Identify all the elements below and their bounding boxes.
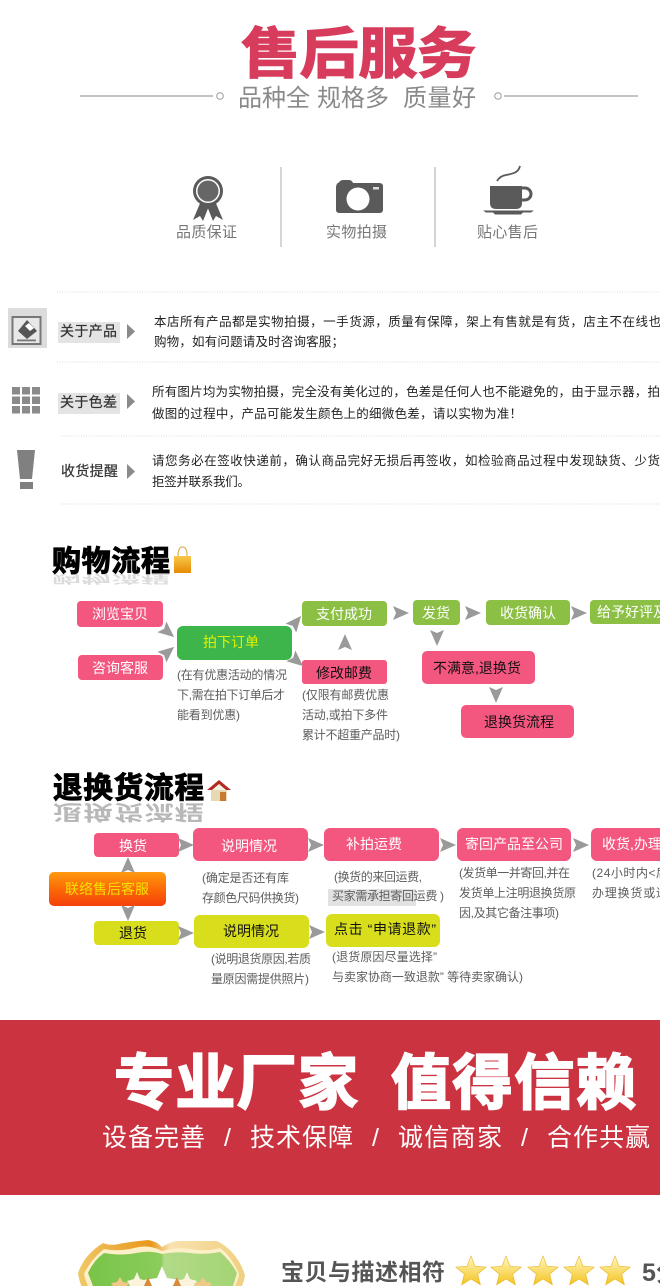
- subtitle with side rules: 质量好: [403, 85, 476, 112]
- note: postage: (仅限有邮费优惠: [302, 688, 389, 702]
- note: check stock: 存颜色尺码供换货): [202, 890, 299, 905]
- row text: about product: 本店所有产品都是实物拍摄，一手货源，质量有保障，架上有售就是有货，店主不在线也: [154, 314, 660, 329]
- step: ship: [413, 600, 460, 625]
- row text: about product: 购物，如有问题请及时咨询客服；: [154, 334, 344, 349]
- heading: shopping process: 购物流程: [52, 545, 170, 578]
- step: payment: 支付成功: [316, 606, 372, 622]
- banner subline: /: [521, 1124, 528, 1152]
- note: return postage: (换货的来回运费,: [334, 869, 422, 884]
- note: 24 hours: [592, 866, 660, 900]
- row text: delivery reminder: 拒签并联系我们。: [152, 474, 250, 489]
- note: order discount: 能看到优惠): [177, 708, 240, 722]
- row text: delivery reminder: [152, 453, 660, 489]
- step: place order: 拍下订单: [203, 634, 259, 650]
- panel: red banner: [0, 1020, 660, 1195]
- note: refund reason: [211, 951, 311, 986]
- step: place order: [177, 626, 292, 660]
- step: contact service: 联络售后客服: [65, 881, 149, 897]
- note: delivery slip: 发货单上注明退换货原: [459, 885, 576, 900]
- row text: about colour difference: 所有图片均为实物拍摄，完全没有美化过的，色差是任何人也不能避免的，由于显示器，拍: [152, 384, 660, 399]
- step: browse: [77, 601, 163, 627]
- heading: shopping process: 购物流程: [52, 573, 170, 586]
- banner subline: 技术保障: [250, 1124, 353, 1152]
- row label: delivery reminder: 收货提醒: [61, 463, 118, 479]
- banner headline: 值得信赖: [391, 1050, 636, 1117]
- banner subline: 诚信商家: [398, 1124, 502, 1152]
- step: modify postage: [302, 660, 387, 684]
- icon: camera: [336, 180, 383, 213]
- note: refund reason: 量原因需提供照片): [211, 971, 309, 986]
- note: postage: 累计不超重产品时): [302, 727, 400, 742]
- note: order discount: 下,需在拍下订单后才: [177, 687, 285, 702]
- step: explain refund: 说明情况: [223, 923, 279, 939]
- step: browse: 浏览宝贝: [92, 606, 148, 622]
- icon: colour grid: [12, 387, 40, 414]
- note: postage: [302, 688, 400, 742]
- step: consult: [78, 655, 163, 680]
- rating label: 宝贝与描述相符: [281, 1259, 445, 1285]
- heading: return process: [53, 772, 204, 823]
- banner headline: 专业厂家: [114, 1050, 358, 1117]
- note: refund choice: [332, 949, 523, 984]
- step: return process: 退换货流程: [484, 714, 554, 730]
- step: refund: [94, 921, 179, 945]
- step: exchange: 换货: [119, 838, 147, 854]
- step: consult: 咨询客服: [92, 660, 148, 676]
- row text: about colour difference: [152, 384, 660, 421]
- row text: about colour difference: 做图的过程中，产品可能发生颜色上的细微色差，请以实物为准！: [152, 406, 522, 421]
- step: apply refund: [326, 914, 440, 947]
- step: contact service: [49, 872, 166, 906]
- note: delivery slip: 因,及其它备注事项): [459, 905, 559, 920]
- note: return postage: [328, 869, 444, 906]
- step: refund: 退货: [119, 925, 147, 941]
- icon: exclamation mark: [17, 450, 35, 489]
- step: confirm: [486, 600, 570, 625]
- step: apply refund: 点击 “申请退款”: [334, 921, 436, 937]
- note: postage: 活动,或拍下多件: [302, 707, 388, 722]
- step: review: [590, 600, 660, 624]
- title: 售后服务: [241, 24, 476, 86]
- step: send back: [457, 828, 571, 861]
- icon: product badge: [8, 308, 47, 348]
- five stars: [456, 1256, 630, 1285]
- note: check stock: (确定是否还有库: [202, 870, 289, 885]
- row text: delivery reminder: 请您务必在签收快递前，确认商品完好无损后再签收，如检验商品过程中发现缺货、少货: [152, 453, 660, 468]
- icon: house: [207, 780, 231, 801]
- arrows: return flow: [121, 838, 589, 940]
- step: return process: [461, 705, 574, 738]
- divider: [280, 167, 282, 247]
- subtitle with side rules: 规格多: [317, 85, 389, 112]
- banner subline: 设备完善: [102, 1124, 205, 1152]
- icon: coffee cup: [483, 166, 534, 214]
- step: confirm: 收货确认: [500, 605, 556, 621]
- banner subline: /: [372, 1124, 379, 1152]
- subtitle with side rules: [80, 85, 638, 112]
- subtitle with side rules: 品种全: [238, 85, 310, 112]
- arrows: shopping flow: [157, 606, 587, 703]
- heading: return process: 退换货流程: [53, 772, 204, 805]
- step: extra postage: [324, 828, 439, 861]
- banner subline: [102, 1124, 650, 1152]
- note: refund choice: (退货原因尽量选择”: [332, 949, 437, 964]
- row text: about product: [154, 314, 660, 349]
- heading: return process: 退换货流程: [53, 800, 204, 823]
- note: return postage: 买家需承担寄回运费 ): [332, 888, 444, 903]
- label: after-sale care: 贴心售后: [477, 224, 538, 241]
- step: explain exchange: 说明情况: [221, 838, 277, 854]
- step: exchange: [94, 833, 179, 857]
- step: modify postage: 修改邮费: [316, 665, 372, 681]
- icon: rosette: [193, 176, 223, 221]
- note: delivery slip: [459, 865, 576, 920]
- row label: about colour difference: 关于色差: [60, 394, 117, 410]
- row label: about product: 关于产品: [60, 323, 117, 339]
- step: receive: [591, 828, 660, 861]
- step: ship: 发货: [422, 605, 450, 621]
- note: refund choice: 与卖家协商一致退款” 等待卖家确认): [332, 969, 523, 984]
- step: explain refund: [194, 915, 309, 948]
- row label: about colour difference: [58, 393, 135, 414]
- step: payment: [302, 601, 387, 626]
- step: extra postage: 补拍运费: [346, 836, 402, 852]
- divider: [434, 167, 436, 247]
- icon: shield badge: [78, 1240, 245, 1286]
- icon: shopping bag: [174, 547, 191, 573]
- banner headline: [114, 1050, 636, 1117]
- row label: about product: [58, 322, 135, 343]
- note: delivery slip: (发货单一并寄回,并在: [459, 865, 570, 880]
- step: send back: 寄回产品至公司: [465, 836, 563, 852]
- label: quality guarantee: 品质保证: [176, 224, 237, 241]
- step: explain exchange: [193, 828, 308, 861]
- banner subline: /: [224, 1124, 231, 1152]
- step: unsatisfied: [422, 651, 535, 684]
- step: unsatisfied: 不满意,退换货: [433, 660, 521, 676]
- note: refund reason: (说明退货原因,若质: [211, 951, 311, 966]
- note: order discount: [177, 667, 287, 722]
- note: check stock: [202, 870, 299, 905]
- label: real photos: 实物拍摄: [326, 224, 387, 241]
- note: order discount: (在有优惠活动的情况: [177, 667, 287, 682]
- banner subline: 合作共赢: [547, 1124, 650, 1152]
